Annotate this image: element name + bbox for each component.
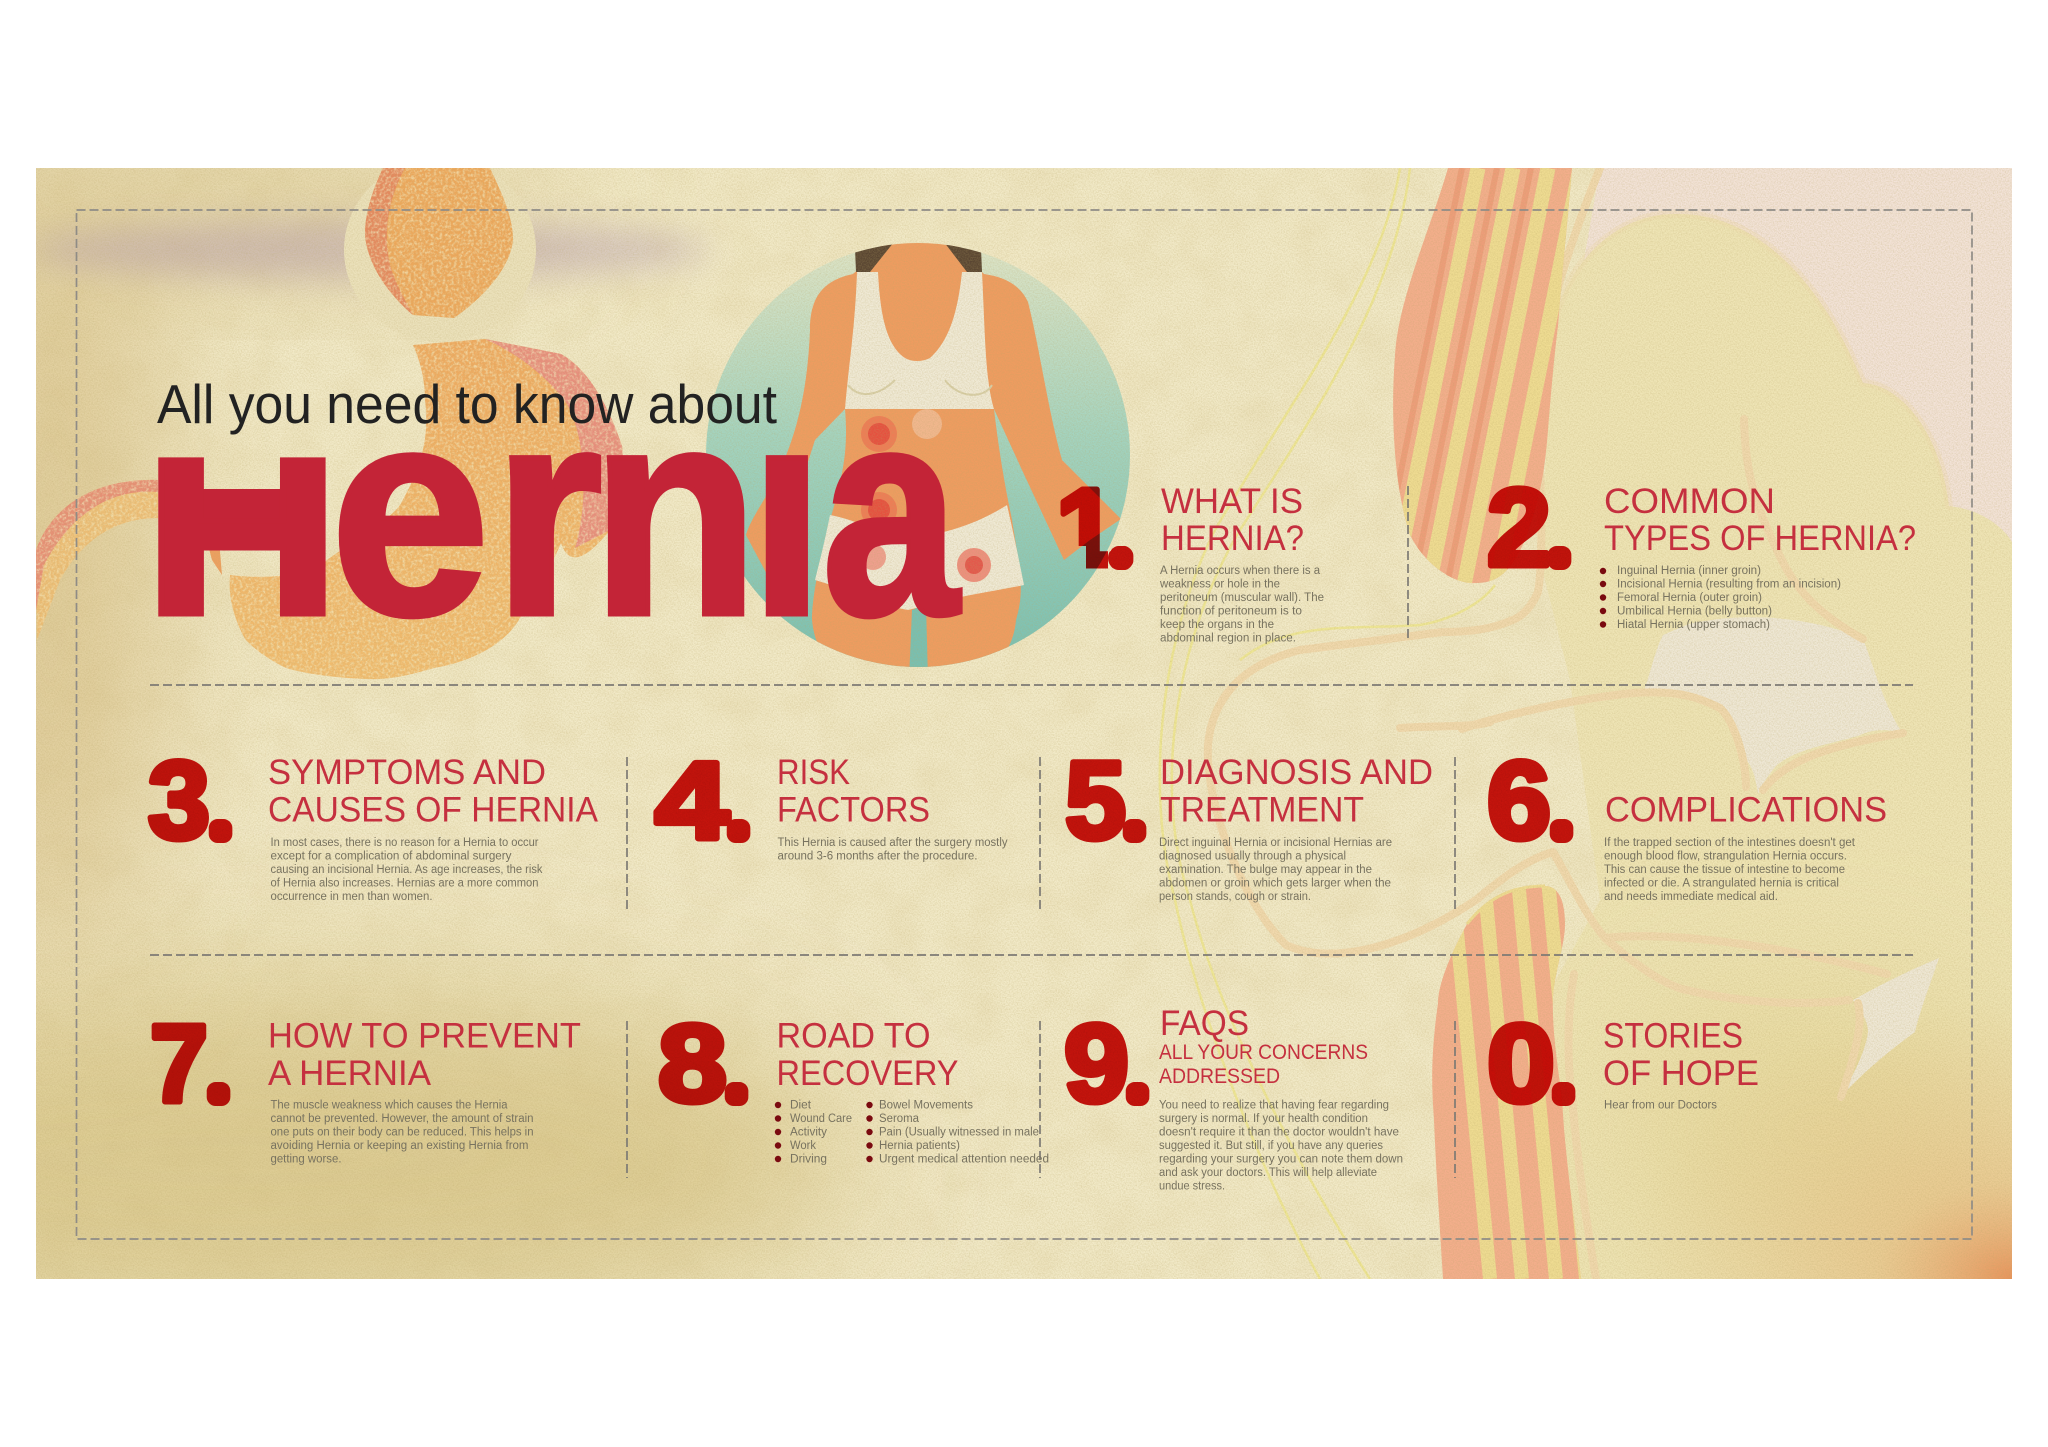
section 4: risk factors: [655, 740, 1008, 862]
body text: You need to realize that having fear regarding: [1159, 1100, 1389, 1112]
body text: examination. The bulge may appear in the: [1159, 864, 1372, 876]
heading: [1159, 1004, 1368, 1088]
heading: HERNIA?: [1161, 519, 1304, 558]
bullet list column 1: [775, 1100, 852, 1166]
number 3: 3: [148, 740, 210, 862]
number 6: .: [1556, 799, 1567, 843]
illustration: stomach: [36, 339, 623, 679]
heading: [1161, 482, 1304, 558]
body text: In most cases, there is no reason for a Hernia to occur: [270, 837, 539, 849]
body text: [1159, 837, 1392, 903]
bullet list column 1: Diet: [790, 1100, 812, 1112]
bullet list: Hiatal Hernia (upper stomach): [1617, 619, 1770, 631]
body text: If the trapped section of the intestines doesn't get: [1604, 837, 1856, 849]
section 3: symptoms and causes: [148, 740, 599, 903]
heading: [776, 1016, 958, 1093]
body text: avoiding Hernia or keeping an existing Hernia from: [270, 1140, 528, 1152]
illustration: purple smear: [30, 220, 710, 280]
body text: causing an incisional Hernia. As age increases, the risk: [270, 864, 543, 876]
number 7: .: [213, 1062, 224, 1106]
heading: OF HOPE: [1603, 1054, 1759, 1093]
body: [746, 250, 1121, 681]
body text: enough blood flow, strangulation Hernia occurs.: [1604, 850, 1847, 862]
number 8: 8: [658, 1002, 727, 1126]
body text: The muscle weakness which causes the Hernia: [270, 1100, 508, 1112]
title: Hernia: a: [822, 346, 961, 677]
section 8: road to recovery: [658, 1002, 1049, 1166]
number 3: .: [215, 799, 226, 843]
heading: CAUSES OF HERNIA: [268, 790, 599, 830]
dashed frame and dividers: [76, 210, 1972, 1239]
bullet list column 2: Hernia patients): [879, 1140, 960, 1152]
number 0: .: [1558, 1062, 1569, 1106]
bullet list: Umbilical Hernia (belly button): [1617, 606, 1772, 618]
section 2: common types of hernia: [1487, 466, 1916, 631]
number 8: .: [731, 1062, 742, 1106]
body text: and needs immediate medical aid.: [1604, 891, 1778, 903]
body text: [270, 837, 543, 903]
bullet list column 1: Driving: [790, 1154, 827, 1166]
white briefs: [815, 505, 1024, 610]
bullet list column 2: Bowel Movements: [879, 1100, 973, 1112]
panel: aged paper background: [36, 168, 2012, 1279]
body text: of Hernia also increases. Hernias are a more common: [270, 878, 538, 890]
heading: A HERNIA: [268, 1054, 432, 1093]
section 1: what is hernia: [1056, 466, 1324, 644]
bullet list: Inguinal Hernia (inner groin): [1617, 565, 1761, 577]
bullet list column 1: Work: [790, 1140, 816, 1152]
body text: [1604, 837, 1856, 903]
illustration: woman in underwear with hernia sites: [706, 240, 1130, 681]
bullet list column 2: Pain (Usually witnessed in male: [879, 1126, 1039, 1138]
heading: TREATMENT: [1160, 790, 1364, 830]
body text: except for a complication of abdominal surgery: [270, 850, 512, 862]
heading: [1160, 753, 1433, 830]
heading: ADDRESSED: [1159, 1065, 1280, 1088]
heading: RISK: [777, 753, 850, 792]
heading: [777, 753, 930, 830]
number 5: 5: [1065, 740, 1126, 862]
number 0: 0: [1487, 1002, 1555, 1126]
bullet list column 1: Activity: [790, 1126, 827, 1138]
heading: FACTORS: [777, 790, 930, 830]
bullet list: Incisional Hernia (resulting from an incision): [1617, 578, 1841, 590]
heading: WHAT IS: [1161, 482, 1303, 521]
section 0: stories of hope: [1487, 1002, 1759, 1126]
body text: regarding your surgery you can note them down: [1159, 1154, 1403, 1166]
title: Hernia: i: [749, 346, 825, 677]
number 9: 9: [1064, 1002, 1129, 1126]
section 5: diagnosis and treatment: [1065, 740, 1433, 903]
title: Hernia: [143, 346, 961, 677]
body text: cannot be prevented. However, the amount of strain: [270, 1113, 534, 1125]
background: pink top-right corner: [1570, 168, 2012, 560]
heading: [268, 753, 599, 830]
body text: This Hernia is caused after the surgery mostly: [778, 837, 1008, 849]
heading: ALL YOUR CONCERNS: [1159, 1041, 1368, 1064]
gap between legs: [909, 604, 928, 680]
body text: Hear from our Doctors: [1604, 1100, 1717, 1112]
number 2: 2: [1487, 466, 1551, 590]
background: intestine outlines: [1208, 168, 1949, 1279]
body text: weakness or hole in the: [1159, 578, 1280, 590]
heading: [1603, 1016, 1759, 1093]
body text: surgery is normal. If your health condition: [1159, 1113, 1368, 1125]
body text: function of peritoneum is to: [1160, 606, 1302, 618]
number 1: 1: [1056, 466, 1117, 590]
body text: diagnosed usually through a physical: [1159, 850, 1346, 862]
hair: [855, 242, 894, 272]
paper grain: [36, 168, 2012, 1279]
number 5: .: [1129, 799, 1140, 843]
body text: undue stress.: [1159, 1180, 1225, 1192]
body text: peritoneum (muscular wall). The: [1160, 592, 1324, 604]
body text: [270, 1100, 534, 1166]
title: Hernia: e: [330, 346, 490, 677]
body text: keep the organs in the: [1160, 619, 1274, 631]
body text: A Hernia occurs when there is a: [1160, 565, 1321, 577]
section 6: complications: [1487, 740, 1887, 903]
heading: [268, 1016, 581, 1093]
section 7: how to prevent: [150, 1002, 581, 1166]
illustration: esophagus: [344, 168, 536, 318]
body text: abdominal region in place.: [1160, 632, 1296, 644]
body text: person stands, cough or strain.: [1159, 891, 1311, 903]
title: Hernia: n: [591, 346, 759, 677]
background: intestine cloud shape: [1540, 214, 2012, 1279]
bullet list column 1: Wound Care: [790, 1113, 852, 1125]
heading: COMMON: [1604, 482, 1775, 521]
heading: STORIES: [1603, 1016, 1743, 1056]
body text: [1159, 565, 1324, 644]
body text: one puts on their body can be reduced. This helps in: [270, 1126, 534, 1138]
bullet list: Femoral Hernia (outer groin): [1617, 592, 1762, 604]
number 6: 6: [1487, 740, 1551, 862]
number 4: .: [733, 799, 744, 843]
section 9: FAQs: [1064, 1002, 1403, 1192]
number 7: 7: [150, 1002, 208, 1126]
texture: speckle on stomach and esophagus: [36, 168, 636, 688]
bullet list column 2: Urgent medical attention needed: [879, 1154, 1049, 1166]
body text: occurrence in men than women.: [270, 891, 432, 903]
heading: COMPLICATIONS: [1605, 790, 1887, 830]
heading: HOW TO PREVENT: [268, 1016, 581, 1056]
illustration: lower intestine tube: [1432, 880, 1586, 1279]
title: Hernia: H: [143, 412, 341, 662]
body text: doesn't require it than the doctor wouldn't have: [1159, 1126, 1399, 1138]
number 4: 4: [655, 740, 729, 862]
bullet list column 2: [866, 1100, 1049, 1166]
number 9: .: [1132, 1062, 1143, 1106]
heading: [1604, 482, 1916, 558]
heading: SYMPTOMS AND: [268, 753, 546, 792]
body text: infected or die. A strangulated hernia is critical: [1604, 878, 1839, 890]
title: all you need to know about: All you need to know about: [157, 373, 777, 435]
heading: ROAD TO: [776, 1016, 930, 1056]
title: Hernia: r: [493, 346, 603, 677]
heading: FAQS: [1160, 1004, 1249, 1043]
body text: abdomen or groin which gets larger when the: [1159, 878, 1391, 890]
number 2: .: [1554, 526, 1565, 570]
hernia sites: [861, 416, 897, 452]
heading: TYPES OF HERNIA?: [1604, 519, 1916, 558]
heading: RECOVERY: [776, 1054, 958, 1093]
head and neck: [880, 240, 965, 358]
background: pale intestine patches: [1643, 617, 1939, 1097]
white top: [845, 272, 994, 409]
bullet list: [1600, 565, 1841, 631]
teal disc: [706, 243, 1130, 667]
number 1: .: [1116, 526, 1127, 570]
body text: getting worse.: [270, 1154, 342, 1166]
background: thin yellow vessel lines: [1160, 168, 1495, 1279]
heading: DIAGNOSIS AND: [1160, 753, 1433, 792]
body text: and ask your doctors. This will help alleviate: [1159, 1167, 1377, 1179]
body text: suggested it. But still, if you have any queries: [1159, 1140, 1383, 1152]
bullet list column 2: Seroma: [879, 1113, 920, 1125]
body text: [778, 837, 1008, 862]
body text: [1159, 1100, 1403, 1192]
body text: This can cause the tissue of intestine to become: [1604, 864, 1845, 876]
body text: around 3-6 months after the procedure.: [778, 850, 978, 862]
illustration: upper intestine tube: [1393, 168, 1572, 584]
body text: Direct inguinal Hernia or incisional Hernias are: [1159, 837, 1392, 849]
